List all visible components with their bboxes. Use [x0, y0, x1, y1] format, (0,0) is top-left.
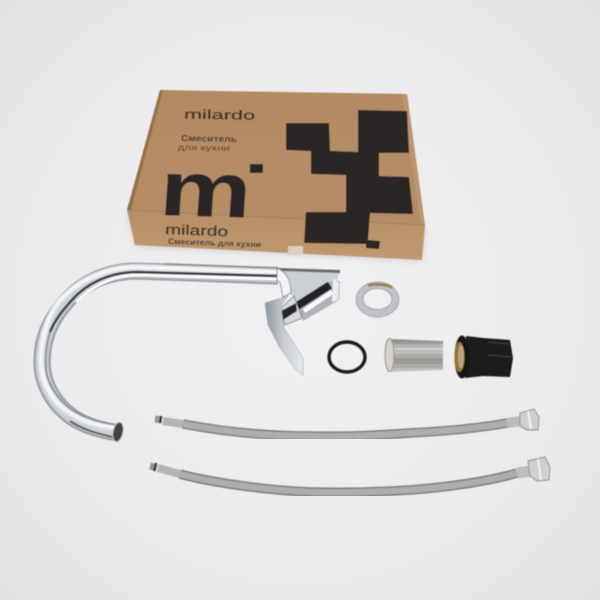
front product text: Смеситель для кухни: [168, 237, 261, 249]
top logo text: milardo: [184, 107, 255, 123]
spout end: [111, 421, 125, 443]
top product text: Смеситель: [181, 133, 237, 144]
black nut with brass insert: [454, 336, 513, 378]
upper hose nut: [520, 409, 539, 430]
rubber o-ring: [329, 342, 365, 372]
threaded cylinder: [385, 338, 443, 372]
box top face: [127, 90, 425, 225]
faucet mixer body: [265, 268, 340, 375]
front logo text: milardo: [165, 221, 229, 239]
large m logo: m: [157, 144, 255, 235]
cardboard box: [127, 90, 427, 262]
upper braided hose: [155, 409, 539, 436]
top product text: для кухни: [178, 143, 230, 153]
chrome washer: [356, 282, 399, 317]
lower braided hose: [150, 457, 550, 492]
black block pattern: [286, 110, 413, 249]
barcode patch: [288, 246, 303, 255]
faucet handle: [265, 296, 303, 375]
top product text: [178, 133, 237, 153]
box front face: [127, 210, 425, 260]
faucet spout: [41, 264, 278, 443]
lower hose nut: [528, 457, 550, 481]
